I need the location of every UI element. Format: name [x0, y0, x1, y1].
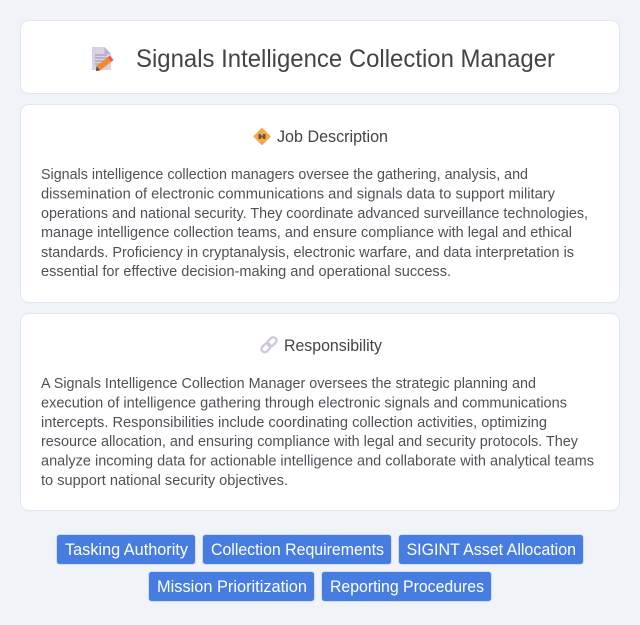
- icon: document with pencil: [92, 47, 114, 71]
- panel: title: [20, 20, 620, 94]
- icon: chain link: [260, 336, 278, 354]
- text block: responsibility: [41, 376, 594, 489]
- text block: responsibility: resource allocation, and ensuring compliance with legal and security protocols. They: [41, 434, 579, 450]
- text block: responsibility: to support national security objectives.: [41, 473, 288, 489]
- heading: job description: Job Description: [277, 128, 388, 146]
- title: Signals Intelligence Collection Manager: [136, 45, 555, 73]
- text block: job description: dissemination of electronic communications and signals data to support military: [41, 186, 556, 202]
- tag: SIGINT Asset Allocation: [398, 534, 584, 564]
- tag: Tasking Authority: Tasking Authority: [65, 541, 189, 559]
- tag: Collection Requirements: Collection Requirements: [211, 541, 384, 559]
- tag: Reporting Procedures: [322, 572, 492, 602]
- text block: responsibility: intercepts. Responsibilities include coordinating collection activities, optimizing: [41, 415, 547, 431]
- panel: responsibility: [20, 314, 620, 510]
- tag: SIGINT Asset Allocation: SIGINT Asset Allocation: [406, 541, 576, 559]
- text block: job description: operations and national security. They coordinate advanced surveillance technologies,: [41, 206, 588, 222]
- icon: job description diamond: [254, 129, 270, 144]
- text block: responsibility: A Signals Intelligence Collection Manager oversees the strategic planning and: [41, 376, 536, 392]
- text block: job description: [41, 167, 588, 280]
- tag: Collection Requirements: [202, 534, 392, 564]
- text block: responsibility: analyze incoming data for actionable intelligence and collaborate with analytical teams: [41, 454, 594, 470]
- text block: job description: Signals intelligence collection managers oversee the gathering, analysis, and: [41, 167, 528, 183]
- tag: Mission Prioritization: Mission Prioritization: [157, 578, 307, 596]
- text block: job description: manage intelligence collection teams, and ensure compliance with legal and ethical: [41, 225, 572, 241]
- tag: Tasking Authority: [56, 534, 196, 564]
- tag: Reporting Procedures: Reporting Procedures: [330, 578, 484, 596]
- text block: job description: essential for effective decision-making and operational success.: [41, 264, 451, 280]
- panel: job description: [20, 104, 620, 302]
- heading: responsibility: Responsibility: [284, 337, 383, 355]
- text block: job description: standards. Proficiency in cryptanalysis, electronic warfare, and data interpretation is: [41, 245, 574, 261]
- tag: Mission Prioritization: [148, 572, 314, 602]
- text block: responsibility: execution of intelligence gathering through electronic signals and communications: [41, 396, 567, 412]
